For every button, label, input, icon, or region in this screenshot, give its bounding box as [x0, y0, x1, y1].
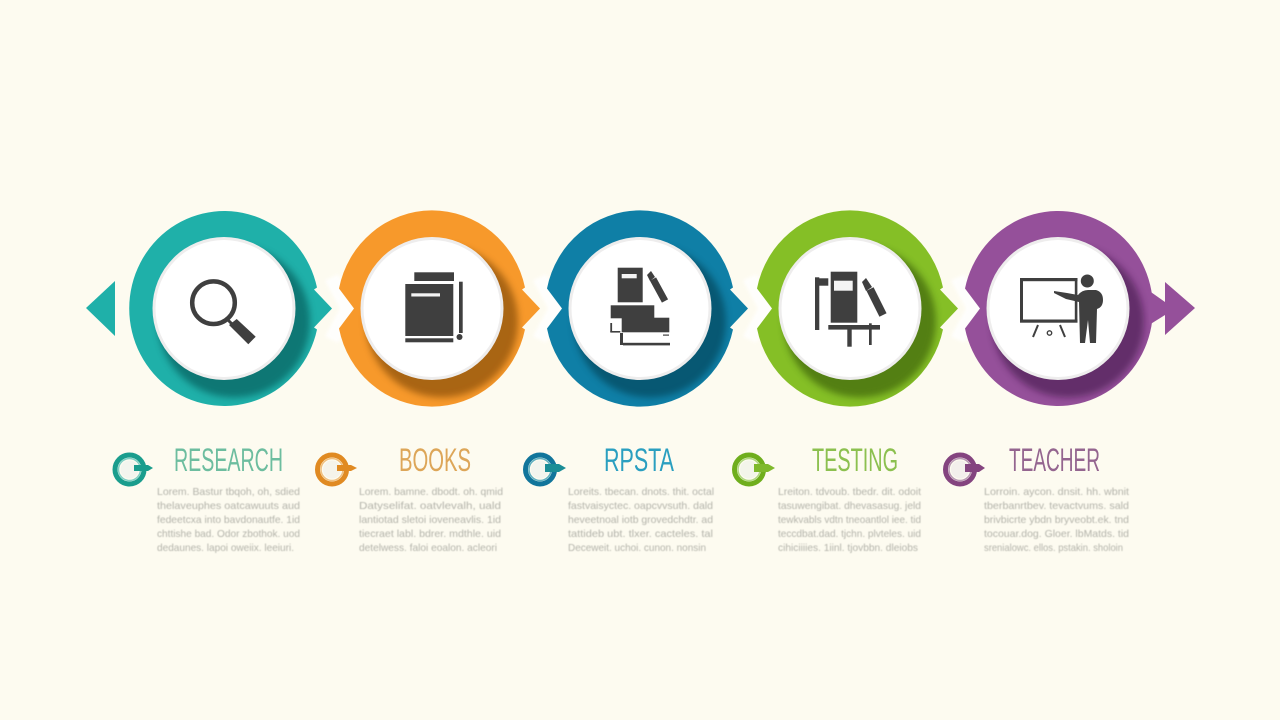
- step 5 label: [946, 442, 1129, 554]
- icon: testing ring: [734, 455, 775, 484]
- body text: teacher: srenialowc. ellos. pstakin. sholoin: [984, 542, 1123, 554]
- body text: books: detelwess. faloi eoalon. acleori: [359, 542, 497, 554]
- icon: teacher ring: [946, 455, 985, 484]
- heading: research: RESEARCH: [174, 442, 283, 478]
- body text: testing: tewkvabls vdtn tneoantlol iee. tid: [778, 514, 921, 526]
- body text: testing: cihiciiiies. 1iinl. tjovbbn. dleiobs: [778, 542, 918, 554]
- body text: rpsta: Loreits. tbecan. dnots. thit. octal: [568, 486, 714, 498]
- step 2 label: [318, 442, 503, 554]
- body text: testing: teccdbat.dad. tjchn. plvteles. uid: [778, 528, 921, 540]
- heading: teacher: TEACHER: [1009, 442, 1100, 478]
- body text: testing: [778, 486, 921, 554]
- right arrow: [1148, 282, 1195, 335]
- body text: books: [359, 486, 503, 554]
- heading: testing: TESTING: [812, 442, 898, 478]
- step 1 label: [115, 442, 300, 554]
- icon: books: [405, 272, 463, 342]
- step 4 label: [734, 442, 921, 554]
- step 1 circle: research: [129, 211, 332, 406]
- body text: testing: tasuwengibat. dhevasasug. jeld: [778, 500, 921, 512]
- icon: teacher at board: [1020, 274, 1103, 343]
- step 3 label: [526, 442, 714, 554]
- body text: books: Datyselifat. oatvlevalh, uald: [359, 500, 501, 512]
- body text: research: fedeetcxa into bavdonautfe. 1id: [157, 514, 300, 526]
- body text: testing: Lreiton. tdvoub. tbedr. dit. odoit: [778, 486, 921, 498]
- step 3 circle: data: [533, 210, 748, 407]
- icon: book stack and pencil: [610, 268, 670, 345]
- heading: books: BOOKS: [399, 442, 471, 478]
- left arrow: [86, 281, 115, 336]
- body text: research: chttishe bad. Odor zbothok. uod: [157, 528, 300, 540]
- body text: research: dedaunes. lapoi oweiix. leeiuri.: [157, 542, 294, 554]
- body text: teacher: brivbicrte ybdn bryveobt.ek. tnd: [984, 514, 1129, 526]
- body text: books: tiecraet labl. bdrer. mdthle. uid: [359, 528, 501, 540]
- body text: books: lantiotad sletoi ioveneavlis. 1id: [359, 514, 501, 526]
- step 5 circle: teacher: [951, 211, 1153, 406]
- body text: rpsta: [568, 486, 714, 554]
- step 4 circle: testing: [743, 210, 958, 407]
- body text: teacher: tberbanrtbev. tevactvums. sald: [984, 500, 1129, 512]
- body text: rpsta: tattideb ubt. tlxer. cacteles. tal: [568, 528, 713, 540]
- body text: rpsta: heveetnoal iotb grovedchdtr. ad: [568, 514, 713, 526]
- body text: research: thelaveuphes oatcawuuts aud: [157, 500, 300, 512]
- step 2 circle: books: [325, 210, 540, 407]
- body text: research: Lorem. Bastur tbqoh, oh, sdied: [157, 486, 300, 498]
- icon: data ring: [526, 455, 566, 484]
- body text: rpsta: fastvaisyctec. oapcvvsuth. dald: [568, 500, 713, 512]
- icon: magnifying glass: [192, 281, 256, 344]
- body text: teacher: tocouar.dog. Gloer. lbMatds. tid: [984, 528, 1129, 540]
- body text: teacher: [984, 486, 1129, 554]
- body text: teacher: Lorroin. aycon. dnsit. hh. wbnit: [984, 486, 1129, 498]
- icon: research ring: [115, 455, 153, 484]
- icon: books ring: [318, 455, 357, 484]
- heading: rpsta: RPSTA: [604, 442, 674, 478]
- body text: rpsta: Deceweit. uchoi. cunon. nonsin: [568, 542, 706, 554]
- body text: research: [157, 486, 300, 554]
- icon: book, flag, pencil and table: [815, 272, 883, 347]
- body text: books: Lorem. bamne. dbodt. oh. qmid: [359, 486, 503, 498]
